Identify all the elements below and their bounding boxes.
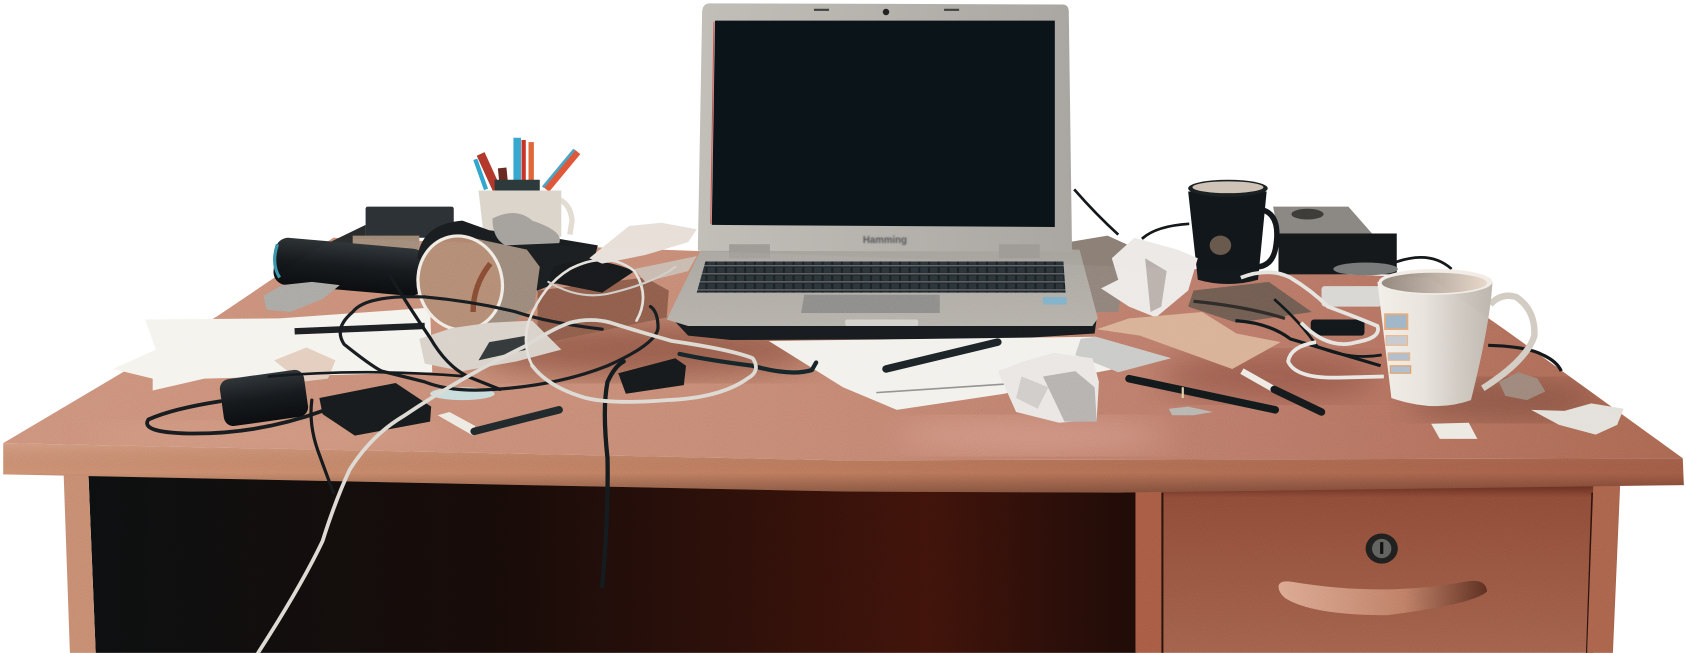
cable dropping to the left (311, 400, 333, 493)
crumpled paper ball (998, 353, 1099, 423)
papers under laptop (769, 337, 1171, 410)
black round adapter (219, 369, 309, 427)
back right cables (1074, 189, 1561, 371)
black pen on paper (295, 326, 425, 331)
black notebook and books (328, 207, 454, 250)
drawer (1161, 484, 1594, 653)
pens (475, 138, 577, 189)
dirty overturned cup (408, 227, 540, 339)
keyboard (697, 261, 1066, 293)
dark clutter behind dirty cup (417, 213, 697, 344)
thick cable to laptop side (680, 354, 816, 372)
mug label (1385, 314, 1411, 373)
film grain overlay (4, 238, 1684, 652)
foil ball (263, 282, 340, 312)
right desk leg (1587, 479, 1620, 653)
power adapters (219, 358, 686, 436)
black cable through the cup (340, 297, 658, 390)
laptop base shadow (672, 318, 1097, 340)
black flat adapter (319, 383, 431, 436)
left desk leg (63, 468, 96, 653)
left sheet of paper (113, 308, 432, 390)
sticker (1043, 297, 1067, 304)
black mug (1188, 180, 1277, 284)
hinges (729, 244, 1040, 258)
white cable across desk (258, 320, 756, 653)
loop cable around adapters (147, 401, 323, 434)
front latch (845, 320, 918, 326)
centre panel (1135, 484, 1161, 653)
webcam and slots (814, 9, 959, 15)
small black plug (618, 358, 686, 394)
desk front edge (3, 443, 1684, 493)
pen and white card on desk (438, 410, 559, 436)
black cylinder (272, 237, 427, 297)
pen on papers (886, 342, 998, 369)
drawer lock (1366, 533, 1398, 564)
white crumpled bag at back (589, 223, 697, 264)
small device box (1273, 207, 1398, 307)
laptop brand logo: Hamming (863, 235, 907, 246)
drawer handle (1278, 581, 1487, 615)
phone on desk (1311, 320, 1364, 336)
pens on right of desk (1129, 371, 1321, 415)
right cable tangle (1194, 272, 1384, 378)
trackpad (801, 295, 940, 313)
laptop (667, 3, 1098, 340)
tangled cables (147, 260, 816, 653)
desk (3, 238, 1684, 653)
torn paper scraps on the right (1431, 372, 1624, 439)
black cable hanging over the edge (602, 361, 624, 586)
crumpled scrap on sheet (274, 347, 335, 382)
big white mug (1377, 269, 1534, 406)
crumpled paper behind laptop (1069, 236, 1312, 323)
desk surface light reflections and shadows (86, 322, 1602, 453)
crumpled paper under cup (419, 321, 561, 371)
desk top surface (3, 238, 1683, 460)
laptop base (667, 250, 1098, 326)
screen (712, 21, 1055, 227)
teal card under cables (430, 387, 495, 400)
pen holder mug with pens (475, 138, 577, 237)
white cable loop (526, 260, 643, 366)
brown paper bag (1097, 312, 1281, 369)
dark knee space (88, 468, 1137, 653)
laptop lid (698, 3, 1072, 252)
